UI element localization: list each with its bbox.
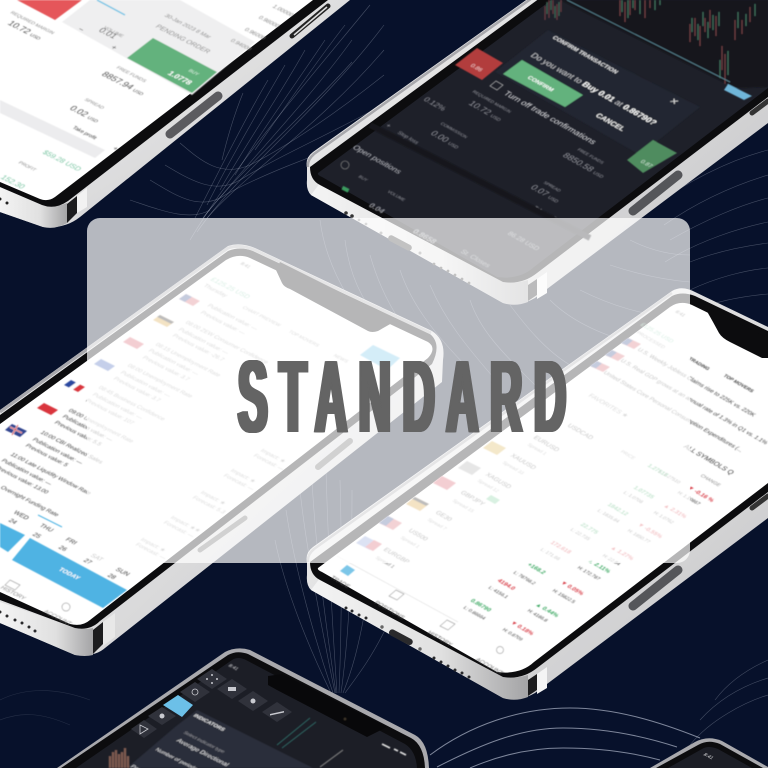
confirm dialog and order panel: Turn off trade confirmations (501, 89, 599, 146)
calendar events: Previous value: 3.7 (140, 356, 191, 382)
calendar events: 08:15 Unemployment Rate (153, 343, 222, 379)
title: STANDARD (238, 339, 578, 454)
confirm dialog and order panel: 0.87 (638, 160, 654, 169)
confirm dialog and order panel: 0.07 USD (528, 183, 563, 204)
calendar events: Previous value: 5 (23, 444, 70, 468)
confirm dialog and order panel: + (383, 123, 393, 129)
symbols: USDCAD (565, 423, 595, 441)
ticket content: FREE FUNDS (114, 66, 148, 84)
confirm dialog and order panel: 0.86 (468, 64, 484, 73)
ticket content: 0.98000 (256, 16, 281, 29)
quotes: 1.27518 (645, 464, 670, 478)
watchlist content: United States Core Personal Consumption Expenditures (... (601, 371, 744, 454)
ticket content: 0.02 USD (67, 104, 103, 124)
quotes: ▲ 0.44% (533, 603, 560, 619)
symbols: EURUSD (531, 435, 561, 453)
quotes: 172.618 (548, 541, 573, 555)
calendar events: Publication value: — (205, 304, 259, 332)
quotes: ▼ -0.55% (635, 523, 664, 540)
phone: dark, bottom right corner (650, 738, 768, 768)
confirm dialog and order panel: 0.04 (366, 202, 388, 215)
watchlist content: H: 4186.8 (525, 609, 549, 623)
day picker: 28 (105, 573, 118, 581)
watchlist content: U.S. Real GDP grows at an annual rate of 1.3% in Q1 vs. 1.1% (618, 359, 768, 446)
quotes: +168.2 (525, 563, 547, 576)
watchlist content: Spread 12 (475, 479, 500, 494)
quotes (468, 464, 715, 637)
symbol icons (483, 441, 506, 455)
confirm dialog and order panel: St. Closes (458, 249, 492, 269)
indicators panel: Select indicator type (181, 731, 226, 755)
symbols (381, 423, 595, 565)
watchlist content: ALL SYMBOLS Q (681, 444, 736, 476)
indicators panel: 8:41 (226, 664, 240, 672)
quotes: 0.86790 (468, 599, 493, 613)
phone frame (0, 244, 444, 655)
ticket content: PENDING ORDER (153, 24, 211, 55)
indicators panel: Average Directional (174, 738, 230, 768)
calendar events: Publication value: — (30, 438, 84, 466)
watchlist content: PROCESSED (634, 331, 667, 350)
divider bar (370, 125, 590, 238)
confirm dialog and order panel: CANCEL (593, 112, 628, 133)
symbols: US500 (406, 528, 430, 542)
calendar events: Overnight Funding Rate (0, 486, 60, 518)
ticket content: + (108, 44, 120, 51)
watchlist content: TOP MOVERS (721, 374, 756, 394)
calendar events: Impact: ★ (258, 448, 288, 464)
calendar events: 09:00 Unemployment Rate (66, 409, 135, 445)
calendar content: Thursday (201, 284, 228, 298)
calendar events: 11:00 Late Liquidity Window Rate (8, 453, 93, 496)
flags (5, 294, 200, 437)
phone: light economic calendar, centre left (0, 244, 444, 656)
calendar events: Previous value: -26.7 (170, 334, 226, 363)
phone: dark indicators, bottom centre (57, 648, 429, 768)
watchlist content: Spread 7 (425, 518, 448, 531)
calendar events: Previous value: 5.5 (52, 421, 103, 447)
quotes: ▼ 0.18% (508, 621, 535, 637)
calendar content: ACCOUNT (41, 610, 73, 627)
calendar content (0, 262, 400, 627)
quotes: 1842.12 (605, 503, 630, 517)
calendar content: £125.25 USD (208, 277, 251, 300)
quotes: ▲ 1.27% (608, 546, 635, 562)
watchlist content: 8:41 (673, 310, 687, 318)
notch (268, 674, 387, 737)
symbols: GBPJPY (458, 490, 487, 507)
speaker dots (0, 610, 36, 632)
day picker: 24 (6, 518, 19, 526)
phone frame (0, 0, 350, 227)
notch (276, 262, 392, 332)
day picker: THU (37, 523, 55, 533)
quotes: ▲ 2.31% (661, 504, 688, 520)
symbols: XAGUSD (483, 472, 513, 490)
ticket content: − (75, 26, 87, 33)
watchlist content: L: 1835.84 (595, 509, 621, 524)
calendar events: 10:00 CBI Realized Sales (38, 431, 104, 465)
calendar events: Previous value: 3.7 (111, 377, 162, 403)
ticket content (0, 0, 295, 190)
calendar content: 8:41 (238, 262, 252, 270)
watchlist content: HISTORY (425, 631, 453, 647)
calendar events: Impact: ★ (138, 537, 168, 553)
side details (528, 674, 537, 696)
today buttons (0, 523, 25, 552)
phone screen (0, 0, 313, 200)
sell button (17, 0, 82, 20)
watchlist content: Spread 1 (373, 556, 396, 569)
calendar events: Forecast: — (221, 474, 255, 492)
confirm dialog and order panel: SPREAD (542, 181, 563, 193)
phone screen (318, 303, 768, 673)
phone: dark, bottom right corner: 8:41 (701, 753, 715, 761)
phone: light watchlist, centre right (307, 288, 768, 700)
open positions: Open positions (350, 144, 404, 175)
ticket content: 30-Jan 2023 8 Mar (162, 14, 212, 40)
confirm dialog and order panel: 0.8658 (410, 228, 439, 245)
calendar events: Publication value: — (146, 349, 200, 377)
symbols: GE30 (433, 510, 454, 523)
quotes: ▼ -0.16 % (685, 486, 715, 504)
confirm button (503, 60, 583, 107)
calendar events: Publication value: — (90, 393, 144, 421)
calendar events: Impact: ★★ (168, 515, 202, 534)
confirm dialog and order panel: 0.00 USD (428, 129, 463, 150)
watchlist content: Spread 33 (500, 461, 525, 476)
watchlist content: L: 0.86664 (461, 606, 487, 621)
calendar events: Publication value: — (176, 328, 230, 356)
watchlist content: Spread 15 (450, 499, 475, 514)
quotes: ▲ 2.11% (585, 559, 612, 575)
day picker: SAT (88, 553, 105, 563)
confirm dialog and order panel: Stop loss (395, 131, 420, 145)
ticket content: REQUIRED MARGIN (8, 11, 56, 36)
confirm dialog and order panel: 8850.58 USD (560, 151, 608, 180)
quotes: ▼ 0.05% (558, 581, 585, 597)
calendar events: Publication value: — (0, 459, 53, 487)
side button and corner (318, 441, 350, 467)
calendar events: Publication value: — (118, 371, 172, 399)
watchlist content: L: 78768.2 (511, 571, 537, 586)
watchlist content: ACCOUNT (473, 658, 504, 676)
watchlist content: L: 171.66 (538, 548, 561, 562)
notch (700, 305, 768, 358)
ticket content: 0.94000 (228, 39, 253, 52)
tab bar (337, 556, 458, 622)
news flags (621, 338, 641, 349)
confirm dialog and order panel: VOLUME (386, 190, 407, 202)
watchlist content: Spread 1 (398, 536, 421, 549)
watchlist content: H: 22.84 (600, 554, 622, 567)
ticket content: 1.00000 (270, 5, 295, 18)
confirm dialog and order panel: CONFIRM TRANSACTION (550, 36, 619, 75)
corner band and buttons (67, 196, 77, 223)
watchlist content: CHANGE (698, 474, 722, 488)
day picker: WED (11, 510, 31, 521)
calendar events: Forecast: 5.3 (190, 496, 227, 515)
calendar events: Forecast: — (161, 521, 195, 539)
watchlist content: TRADE (328, 576, 351, 589)
indicators panel: INDICATORS (191, 714, 226, 733)
phone frame (307, 288, 768, 699)
phone frame (57, 648, 429, 768)
calendar events: Previous value: — (198, 311, 246, 336)
symbols: EURGBP (381, 547, 411, 565)
active indicator button (163, 695, 193, 717)
watchlist content: H: 1.10867 (675, 491, 702, 507)
day picker: FRI (63, 537, 78, 546)
calendar content: TODAY (56, 567, 82, 581)
watchlist content: POSITIONS (372, 601, 406, 621)
speaker and port (344, 211, 470, 284)
watchlist content: L: 1.27510 (656, 470, 682, 485)
watchlist content: H: 1850.77 (625, 529, 652, 545)
calendar events: Previous value: 107 (83, 399, 136, 426)
watchlist content: H: 0.8709 (500, 628, 524, 642)
quotes: 1.07735 (631, 486, 656, 500)
sell and buy buttons (455, 48, 503, 80)
watchlist content: L: 1.0708 (621, 491, 644, 505)
confirm dialog and order panel: Do you want to Buy 0.01 at 0.86790? (528, 51, 659, 127)
ticket content: $59.28 USD (40, 149, 84, 173)
day picker: 26 (56, 545, 69, 553)
favourites and symbols headers: FAVORITES ★ (586, 392, 631, 419)
confirm dialog and order panel: BUY (357, 175, 369, 182)
checkbox (490, 81, 503, 90)
day picker: SUN (113, 567, 131, 578)
watchlist content: L: 4156.1 (486, 586, 509, 600)
ticket content: 0.01 (96, 26, 120, 40)
confirm dialog and order panel: 10.72 USD (466, 99, 506, 123)
watchlist content: H: 15822.5 (550, 589, 577, 605)
calendar content: NEWS (331, 354, 350, 364)
ticket content: VOLUME (101, 26, 125, 39)
toolbar buttons (131, 669, 292, 738)
watchlist content: H: 172.787 (575, 566, 602, 582)
ticket content: PROFIT (16, 161, 37, 172)
calendar events: Forecast: — (133, 543, 167, 561)
watchlist content: PRICE (618, 450, 637, 461)
side details (528, 101, 768, 301)
phone: light trade ticket, top left (0, 0, 350, 228)
phone screen (0, 256, 432, 625)
watchlist content: H: 1.0762 (651, 511, 675, 525)
calendar events: Publication value: — (60, 415, 114, 443)
toolbar glyphs (140, 674, 284, 734)
calendar events: 08:45 Business Confidence (96, 386, 167, 422)
calendar events: 08:00 ZEW Consumer Confidence (183, 321, 270, 366)
candlestick chart (545, 0, 750, 84)
confirm dialog and order panel: × (666, 95, 683, 107)
calendar events: Forecast: — (251, 454, 285, 472)
calendar content: TOP MOVERS (286, 330, 321, 348)
calendar events: Impact: ★ (228, 468, 258, 484)
ticket content: + (110, 146, 120, 152)
quotes: 22.775 (578, 523, 600, 536)
confirm dialog and order panel: CONFIRM (525, 76, 554, 93)
ticket content: 10.72 USD (5, 19, 45, 41)
confirm dialog and order panel (341, 0, 768, 269)
calendar events: 08:00 Unemployment Rate (125, 364, 194, 400)
day picker: 27 (81, 558, 94, 566)
watchlist content: L: 22.735 (568, 528, 591, 542)
confirm dialog and order panel: COMMISSION (439, 122, 469, 139)
confirm dialog and order panel: REQUIRED MARGIN (471, 90, 513, 114)
ticket content: 1.0778 (165, 70, 195, 86)
ticket content: 8857.94 USD (99, 70, 148, 97)
speaker and port (344, 606, 470, 678)
confirm dialog and order panel: FREE FUNDS (576, 148, 605, 165)
translucent title panel (87, 218, 690, 563)
day picker: 25 (30, 532, 43, 540)
mini chart (110, 748, 128, 768)
calendar events (0, 304, 288, 561)
phone: dark confirm transaction, top right (307, 0, 768, 305)
day picker (6, 510, 131, 581)
watchlist content: TRADING (686, 357, 711, 372)
phone screen (318, 0, 768, 278)
watchlist content: £125.25 USD (638, 323, 675, 345)
ticket content: BUY (186, 69, 201, 77)
confirm dialog and order panel: 0.12% (421, 96, 448, 112)
ticket content: Take profit (70, 126, 98, 141)
quotes: 4194.0 (495, 579, 517, 592)
dialog box (495, 30, 700, 155)
watchlist content (328, 310, 768, 676)
watchlist content: Spread 1 (525, 443, 548, 456)
confirm dialog and order panel: 86.28 USD (505, 231, 541, 252)
ticket content: 0.96000 (242, 28, 267, 41)
ticket content: SPREAD (82, 98, 106, 111)
phone frame (307, 0, 768, 305)
buy button (127, 38, 217, 93)
symbols: XAUUSD (508, 453, 538, 471)
calendar content: CHART PREVIEW (240, 306, 282, 328)
phone screen (76, 658, 417, 768)
calendar events: Impact: ★ (198, 490, 228, 506)
news items: U.S. Weekly Jobless Claims rise to 225K vs. 220K (635, 348, 756, 418)
indicators panel (110, 664, 406, 768)
confirm dialog and order panel: Take profit (531, 206, 559, 222)
